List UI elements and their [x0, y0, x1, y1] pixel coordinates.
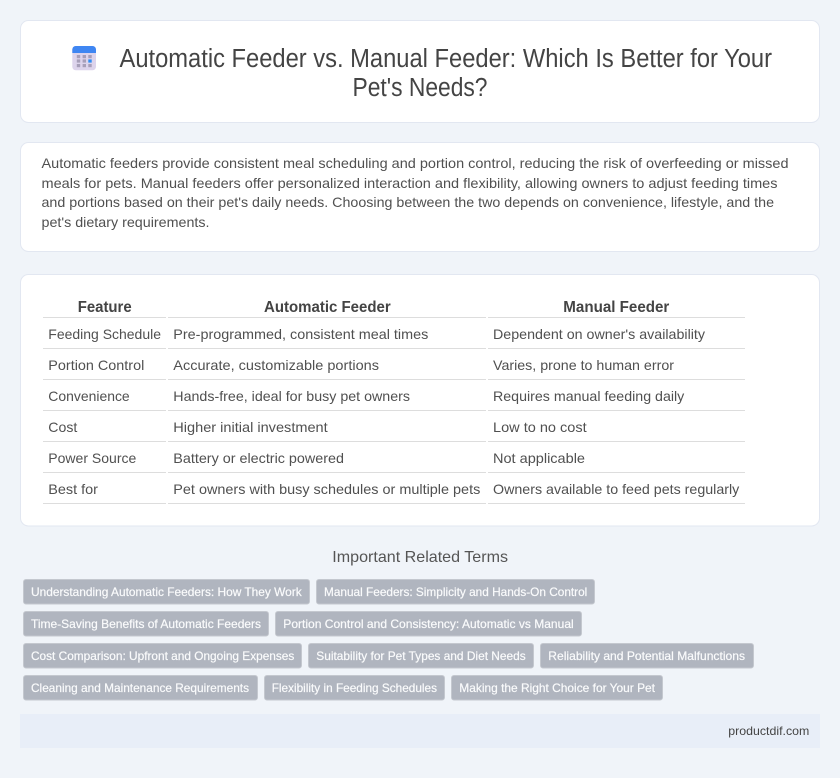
related term tags: [24, 580, 754, 700]
row: power source: Not applicable: [493, 450, 585, 466]
title: Automatic Feeder vs. Manual Feeder: Which Is Better for Your: [120, 45, 772, 73]
tag: Understanding Automatic Feeders: How They Work: [31, 585, 303, 599]
table header row: Automatic Feeder: [264, 299, 391, 316]
tag: [24, 644, 302, 668]
tag: [452, 676, 662, 700]
row: convenience: Hands-free, ideal for busy pet owners: [173, 388, 410, 404]
tag: Flexibility in Feeding Schedules: [272, 681, 437, 695]
tag: Manual Feeders: Simplicity and Hands-On Control: [324, 585, 587, 599]
tag: [264, 676, 444, 700]
panel: intro paragraph: and portions based on their pet's daily needs. Choosing between the two depends on convenience, lifestyle, and the: [42, 194, 774, 210]
row: cost: Low to no cost: [493, 419, 587, 435]
panel: comparison table: [20, 274, 820, 526]
row: portion control: Accurate, customizable portions: [173, 357, 379, 373]
heading: important related terms: Important Related Terms: [332, 549, 508, 566]
row: feeding schedule: Dependent on owner's availability: [493, 326, 705, 342]
tag: Cost Comparison: Upfront and Ongoing Expenses: [31, 649, 294, 663]
footer bar: productdif.com: [728, 724, 809, 738]
header panel: [20, 20, 820, 122]
row: convenience: Convenience: [48, 388, 130, 404]
row: best for: [43, 481, 745, 504]
row: convenience: [43, 388, 745, 411]
tag: Cleaning and Maintenance Requirements: [31, 681, 249, 695]
tag: [24, 676, 258, 700]
row: feeding schedule: Pre-programmed, consistent meal times: [173, 326, 428, 342]
tag: Making the Right Choice for Your Pet: [459, 681, 656, 695]
row: portion control: Varies, prone to human error: [493, 357, 674, 373]
tag: Portion Control and Consistency: Automatic vs Manual: [283, 617, 574, 631]
row: cost: Cost: [48, 419, 77, 435]
panel: intro paragraph: [20, 142, 820, 252]
row: feeding schedule: [43, 326, 745, 349]
tag: [276, 612, 582, 636]
title: Pet's Needs?: [352, 74, 488, 102]
panel: intro paragraph: pet's dietary requirements.: [42, 214, 210, 230]
tag: Time-Saving Benefits of Automatic Feeders: [31, 617, 261, 631]
title: [120, 45, 772, 102]
row: power source: Power Source: [48, 450, 137, 466]
row: best for: Pet owners with busy schedules or multiple pets: [173, 481, 480, 497]
panel: intro paragraph: meals for pets. Manual feeders offer personalized interaction and flexibility, allowing owners to adjust feeding times: [42, 175, 778, 191]
row: cost: [43, 419, 745, 442]
row: portion control: [43, 357, 745, 380]
tag: [316, 580, 594, 604]
tag: [308, 644, 534, 668]
table header row: Manual Feeder: [563, 299, 669, 316]
footer bar: [20, 714, 820, 748]
row: portion control: Portion Control: [48, 357, 144, 373]
row: best for: Best for: [48, 481, 98, 497]
row: feeding schedule: Feeding Schedule: [48, 326, 161, 342]
row: power source: [43, 450, 745, 473]
row: convenience: Requires manual feeding daily: [493, 388, 684, 404]
row: best for: Owners available to feed pets regularly: [493, 481, 739, 497]
tag: Reliability and Potential Malfunctions: [548, 649, 745, 663]
table header row: [43, 299, 745, 318]
tag: [540, 644, 754, 668]
row: power source: Battery or electric powered: [173, 450, 344, 466]
tag: [24, 580, 310, 604]
icon: calendar: [72, 46, 96, 70]
tag: Suitability for Pet Types and Diet Needs: [316, 649, 526, 663]
panel: intro paragraph: Automatic feeders provide consistent meal scheduling and portion control, reducing the risk of overfeeding or missed: [42, 155, 788, 171]
tag: [24, 612, 268, 636]
table header row: Feature: [78, 299, 132, 316]
row: cost: Higher initial investment: [173, 419, 328, 435]
